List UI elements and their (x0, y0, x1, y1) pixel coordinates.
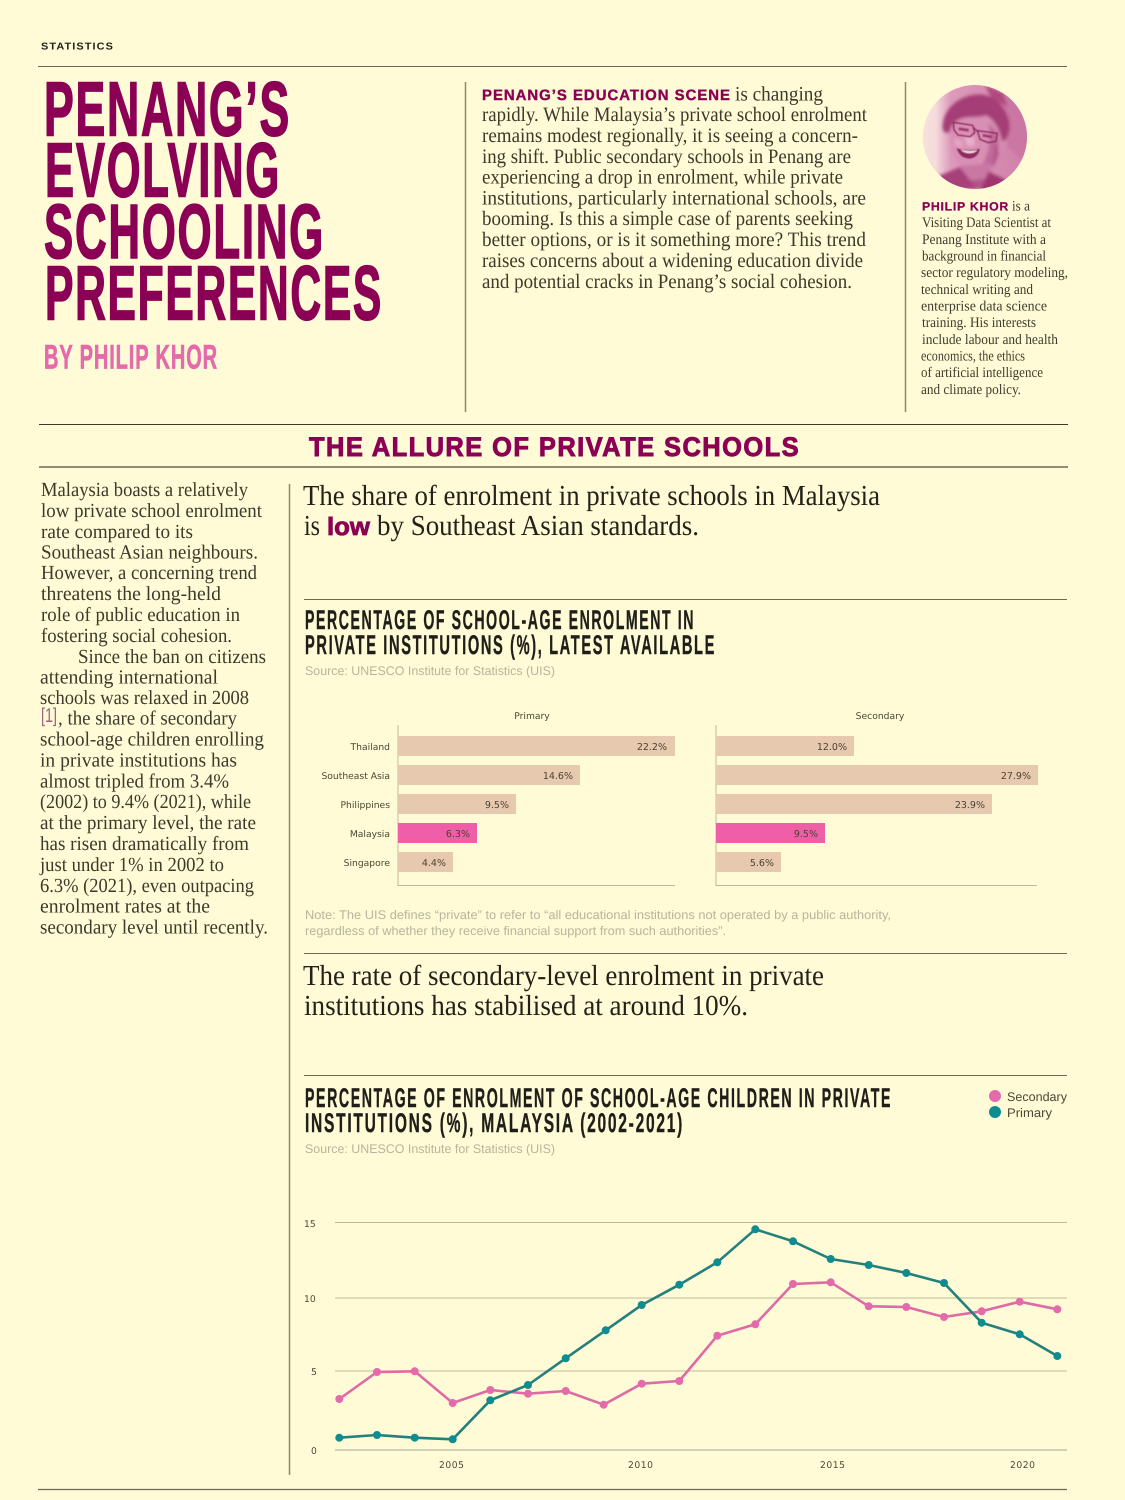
author bio: Visiting Data Scientist at (922, 215, 1051, 231)
body text column: attending international (40, 666, 218, 688)
chart heading: percentage in private institutions: PRIVATE INSTITUTIONS (%), LATEST AVAILABLE (305, 630, 716, 660)
title: EVOLVING (45, 128, 281, 214)
intro paragraph: booming. Is this a simple case of parents seeking (482, 208, 853, 230)
author bio: Penang Institute with a (922, 232, 1047, 248)
legend (989, 1090, 1068, 1120)
body text column: has risen dramatically from (40, 833, 249, 855)
series: secondary (335, 1278, 1061, 1409)
section label: statistics: STATISTICS (41, 42, 114, 52)
author bio: background in financial (922, 248, 1046, 264)
bar: Southeast Asia secondary: 27.9% (1001, 771, 1031, 782)
author bio: economics, the ethics (921, 348, 1025, 364)
bar: Thailand: 22.2% (637, 742, 667, 753)
body text column: almost tripled from 3.4% (40, 770, 229, 792)
body text column (39, 479, 268, 938)
author portrait (923, 85, 1027, 189)
author bio: of artificial intelligence (921, 365, 1043, 381)
bar: Southeast Asia secondary (716, 765, 1038, 785)
chart heading: Malaysia 2002-2021: INSTITUTIONS (%), MALAYSIA (2002-2021) (305, 1108, 684, 1138)
bar: Singapore (344, 852, 453, 872)
bar: Philippines (340, 794, 516, 814)
body text column: school-age children enrolling (40, 728, 264, 750)
y axis labels: 15 (304, 1219, 316, 1230)
bar: Singapore: 4.4% (422, 858, 446, 869)
body text column: Since the ban on citizens (78, 646, 266, 668)
bar: Singapore secondary: 5.6% (750, 858, 774, 869)
bar: Singapore: Singapore (344, 858, 390, 869)
intro paragraph: PENANG’S EDUCATION SCENE (482, 87, 731, 104)
bar chart: secondary: Secondary (856, 711, 905, 722)
author bio: technical writing and (921, 282, 1034, 298)
headline: share of enrolment (303, 480, 880, 542)
headline: share of enrolment: by Southeast Asian standards. (377, 510, 699, 542)
source note: Source: UNESCO Institute for Statistics (UIS) (305, 664, 555, 678)
line chart (304, 1219, 1067, 1471)
section heading: THE ALLURE OF PRIVATE SCHOOLS (309, 432, 800, 462)
y axis labels: 0 (311, 1446, 317, 1457)
intro paragraph: and potential cracks in Penang’s social cohesion. (482, 271, 852, 293)
intro paragraph: experiencing a drop in enrolment, while private (482, 166, 843, 188)
body text column: (2002) to 9.4% (2021), while (40, 791, 251, 813)
bar: Malaysia: Malaysia (350, 829, 390, 840)
intro paragraph: rapidly. While Malaysia’s private school enrolment (482, 104, 867, 126)
headline: share of enrolment: is (304, 510, 320, 542)
intro paragraph (482, 84, 867, 293)
body text column: Southeast Asian neighbours. (41, 542, 258, 564)
intro paragraph: ing shift. Public secondary schools in Penang are (482, 146, 851, 168)
body text column: schools was relaxed in 2008 (40, 687, 249, 709)
chart heading: percentage in private institutions (305, 605, 716, 660)
body text column: 6.3% (2021), even outpacing (40, 875, 254, 897)
body text column: role of public education in (41, 604, 240, 626)
author bio: training. His interests (922, 315, 1036, 331)
body text column: secondary level until recently. (40, 916, 268, 938)
body text column: However, a concerning trend (41, 562, 257, 584)
intro paragraph: better options, or is it something more? This trend (482, 229, 866, 251)
source note 2: Source: UNESCO Institute for Statistics (UIS) (305, 1142, 555, 1156)
bar chart: primary: Primary (514, 711, 550, 722)
body text column: threatens the long-held (41, 583, 221, 605)
body text column: just under 1% in 2002 to (39, 854, 224, 876)
series: primary (335, 1225, 1061, 1443)
byline: BY PHILIP KHOR (44, 338, 218, 376)
bar: Philippines secondary: 23.9% (955, 800, 985, 811)
title: SCHOOLING (44, 189, 325, 275)
title: PREFERENCES (45, 250, 383, 336)
author bio: sector regulatory modeling, (921, 265, 1068, 281)
body text column: enrolment rates at the (40, 896, 210, 918)
body text column: rate compared to its (41, 521, 193, 543)
body text column: [1] (41, 705, 57, 727)
title (44, 66, 383, 336)
intro paragraph: is changing (735, 84, 823, 106)
bar: Malaysia (350, 823, 477, 843)
legend: Secondary (1007, 1090, 1068, 1104)
x axis labels: 2005 (439, 1460, 464, 1471)
headline: secondary-level rate: institutions has stabilised at around 10%. (304, 990, 748, 1022)
body text column: Malaysia boasts a relatively (41, 479, 248, 501)
chart footnote: regardless of whether they receive financial support from such authorities”. (305, 924, 726, 938)
bar: Malaysia secondary (716, 823, 825, 843)
bar chart: primary (321, 711, 675, 886)
bar: Thailand secondary: 12.0% (817, 742, 847, 753)
bar: Southeast Asia (321, 765, 580, 785)
body text column: at the primary level, the rate (40, 812, 256, 834)
bar: Malaysia secondary: 9.5% (794, 829, 818, 840)
bar: Philippines: Philippines (340, 800, 390, 811)
x axis labels (439, 1460, 1035, 1471)
chart heading: Malaysia 2002-2021 (305, 1083, 892, 1138)
author bio: is a (1012, 198, 1031, 214)
y axis labels: 10 (304, 1294, 316, 1305)
body text column: low private school enrolment (41, 500, 262, 522)
author bio: include labour and health (922, 332, 1059, 348)
y axis labels (304, 1219, 317, 1457)
body text column: in private institutions has (40, 750, 237, 772)
author bio: and climate policy. (921, 382, 1021, 398)
intro paragraph: remains modest regionally, it is seeing a concern- (482, 125, 858, 147)
chart footnote (305, 908, 891, 938)
intro paragraph: raises concerns about a widening education divide (482, 250, 863, 272)
bar: Thailand secondary (716, 736, 854, 756)
bar: Philippines: 9.5% (485, 800, 509, 811)
bar: Southeast Asia: Southeast Asia (321, 771, 390, 782)
intro paragraph: institutions, particularly international schools, are (482, 188, 866, 210)
bar: Southeast Asia: 14.6% (543, 771, 573, 782)
headline: share of enrolment: low (327, 513, 371, 541)
x axis labels: 2015 (820, 1460, 845, 1471)
chart heading: percentage in private institutions: PERCENTAGE OF SCHOOL-AGE ENROLMENT IN (305, 605, 695, 635)
bar: Philippines secondary (716, 794, 992, 814)
bar: Thailand (350, 736, 675, 756)
bar chart: secondary (716, 711, 1038, 886)
x axis labels: 2010 (628, 1460, 653, 1471)
chart footnote: Note: The UIS defines “private” to refer to “all educational institutions not operated by a public authority, (305, 908, 891, 922)
author bio: enterprise data science (921, 298, 1047, 314)
bar: Singapore secondary (716, 852, 781, 872)
bar: Malaysia: 6.3% (446, 829, 470, 840)
bar: Thailand: Thailand (350, 742, 390, 753)
author bio (921, 198, 1068, 398)
headline: secondary-level rate: The rate of secondary-level enrolment in private (303, 960, 824, 992)
headline: secondary-level rate (303, 960, 824, 1022)
y axis labels: 5 (311, 1367, 317, 1378)
headline: share of enrolment: The share of enrolment in private schools in Malaysia (303, 480, 880, 512)
title: PENANG’S (44, 66, 291, 152)
x axis labels: 2020 (1010, 1460, 1035, 1471)
body text column: fostering social cohesion. (41, 625, 232, 647)
body text column: , the share of secondary (58, 708, 237, 730)
author bio: PHILIP KHOR (922, 200, 1009, 214)
legend: Primary (1007, 1106, 1053, 1120)
